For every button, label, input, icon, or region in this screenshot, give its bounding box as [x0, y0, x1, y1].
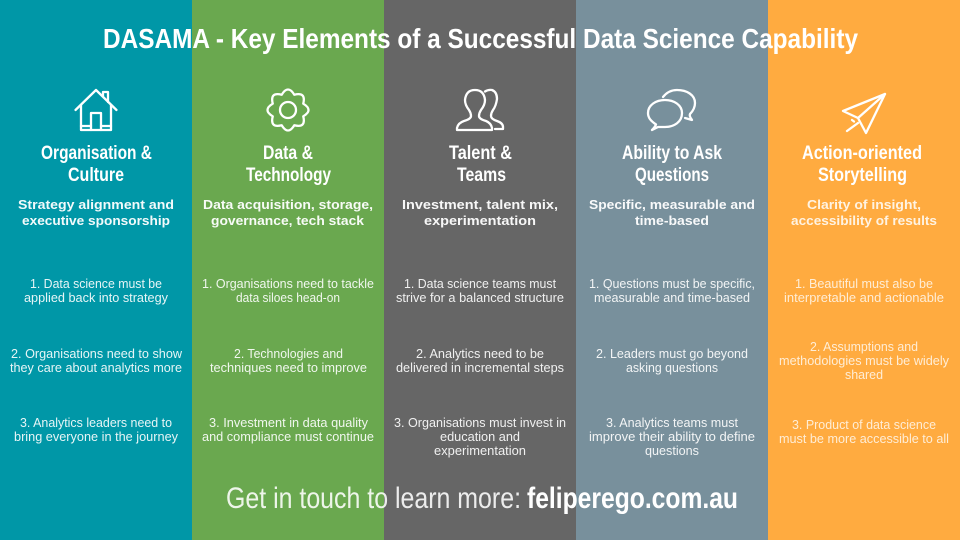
point 3: must be more accessible to all — [779, 432, 949, 446]
point 2: techniques need to improve — [210, 361, 367, 375]
icon: gear — [267, 89, 309, 131]
footer call to action — [226, 482, 738, 515]
point 3: experimentation — [434, 444, 526, 458]
heading: organisation and culture — [41, 143, 152, 186]
point 3: 3. Analytics leaders need to — [20, 416, 172, 430]
point 1 — [24, 277, 169, 305]
subheading: investment: experimentation — [424, 213, 536, 228]
subheading: data acquisition: governance, tech stack — [211, 213, 365, 228]
point 3 — [589, 416, 755, 458]
heading: data and technology — [246, 143, 331, 186]
point 2 — [10, 347, 183, 375]
point 1: 1. Questions must be specific, — [589, 277, 755, 291]
point 3: 3. Investment in data quality — [209, 416, 369, 430]
subheading: clarity of insight: accessibility of results — [791, 213, 937, 228]
point 2: asking questions — [626, 361, 718, 375]
point 2: 2. Technologies and — [234, 347, 343, 361]
point 1: applied back into strategy — [24, 291, 169, 305]
subheading: clarity of insight — [791, 197, 937, 228]
point 1: 1. Data science must be — [30, 277, 162, 291]
point 1: strive for a balanced structure — [396, 291, 564, 305]
panel: talent and teams — [384, 0, 576, 540]
point 3 — [14, 416, 179, 444]
point 1: 1. Data science teams must — [404, 277, 557, 291]
point 2: delivered in incremental steps — [396, 361, 564, 375]
panel: data and technology — [192, 0, 384, 540]
point 3: bring everyone in the journey — [14, 430, 179, 444]
point 2: 2. Leaders must go beyond — [596, 347, 748, 361]
title: DASAMA - Key Elements of a Successful Data Science Capability — [103, 23, 858, 54]
point 3: and compliance must continue — [202, 430, 374, 444]
point 1 — [589, 277, 755, 305]
point 2 — [396, 347, 564, 375]
heading: action-oriented storytelling — [802, 143, 922, 186]
panel: action-oriented storytelling — [768, 0, 960, 540]
point 3: improve their ability to define — [589, 430, 755, 444]
subheading: investment: Investment, talent mix, — [402, 197, 558, 212]
point 1 — [784, 277, 944, 305]
subheading: strategy alignment: Strategy alignment and — [18, 197, 174, 212]
point 1: interpretable and actionable — [784, 291, 944, 305]
point 2: 2. Analytics need to be — [416, 347, 544, 361]
heading: talent and teams: Teams — [457, 165, 506, 186]
point 1 — [396, 277, 564, 305]
icon: paper plane — [843, 94, 885, 133]
footer call to action: Get in touch to learn more: — [226, 482, 521, 515]
heading: ability to ask questions: Ability to Ask — [622, 143, 722, 164]
point 1: measurable and time-based — [594, 291, 750, 305]
icon: house — [76, 90, 116, 130]
point 2 — [596, 347, 748, 375]
subheading: specific: Specific, measurable and — [589, 197, 755, 212]
point 1: 1. Organisations need to tackle — [202, 277, 374, 291]
point 2 — [210, 347, 367, 375]
point 2: methodologies must be widely — [779, 354, 950, 368]
point 3 — [779, 418, 949, 446]
point 1: data siloes head-on — [236, 291, 340, 305]
point 3 — [202, 416, 374, 444]
icon: speech bubbles — [648, 90, 695, 130]
footer call to action: feliperego.com.au — [527, 482, 738, 515]
point 2: they care about analytics more — [10, 361, 182, 375]
point 3: education and — [440, 430, 520, 444]
point 3 — [394, 416, 566, 458]
subheading: clarity of insight: Clarity of insight, — [807, 197, 921, 212]
point 3: 3. Analytics teams must — [606, 416, 739, 430]
point 2: 2. Assumptions and — [810, 340, 918, 354]
heading: talent and teams — [449, 143, 512, 186]
panel: ability to ask questions — [576, 0, 768, 540]
point 3: 3. Organisations must invest in — [394, 416, 566, 430]
heading: organisation and culture: Culture — [68, 165, 124, 186]
panel: organisation and culture — [0, 0, 192, 540]
subheading: data acquisition — [203, 197, 373, 228]
point 3: 3. Product of data science — [792, 418, 936, 432]
heading: talent and teams: Talent & — [449, 143, 512, 164]
heading: data and technology: Technology — [246, 165, 331, 186]
point 2 — [779, 340, 950, 382]
subheading: specific — [589, 197, 755, 228]
icon: two people — [457, 90, 503, 130]
heading: action-oriented storytelling: Storytelling — [818, 165, 907, 186]
subheading: strategy alignment — [18, 197, 174, 228]
point 2: 2. Organisations need to show — [11, 347, 183, 361]
subheading: investment — [402, 197, 558, 228]
subheading: specific: time-based — [635, 213, 709, 228]
point 1 — [202, 277, 374, 305]
heading: ability to ask questions — [622, 143, 722, 186]
heading: action-oriented storytelling: Action-oriented — [802, 143, 922, 164]
point 2: shared — [845, 368, 883, 382]
point 1: 1. Beautiful must also be — [795, 277, 933, 291]
subheading: data acquisition: Data acquisition, storage, — [203, 197, 373, 212]
heading: organisation and culture: Organisation & — [41, 143, 152, 164]
heading: ability to ask questions: Questions — [635, 165, 709, 186]
subheading: strategy alignment: executive sponsorship — [22, 213, 170, 228]
point 3: questions — [645, 444, 699, 458]
heading: data and technology: Data & — [263, 143, 313, 164]
